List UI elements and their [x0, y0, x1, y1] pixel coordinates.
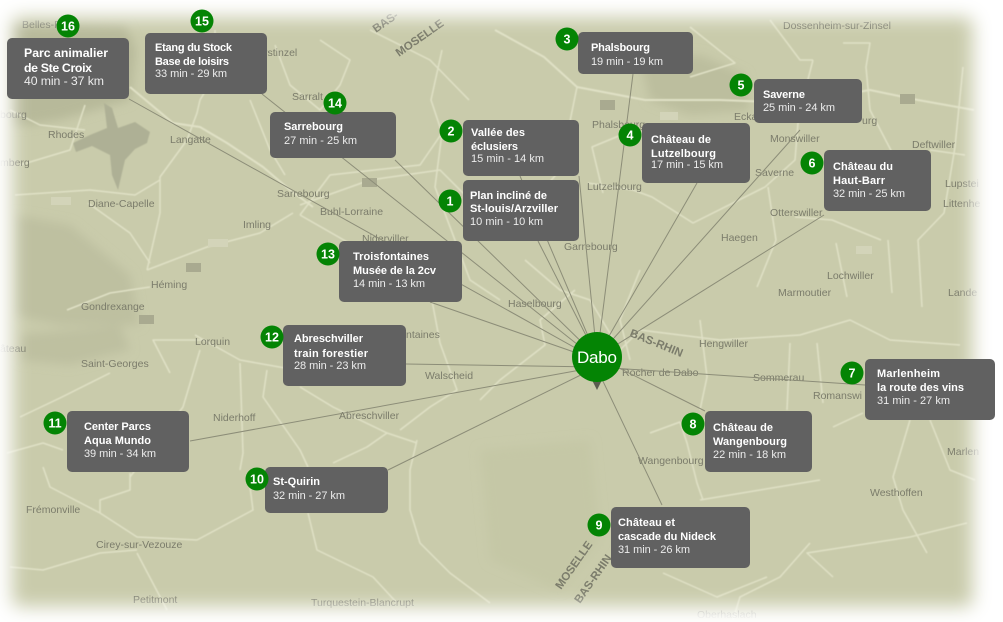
destination 15: Etang du Stock — [155, 42, 233, 54]
destination 4: 4 — [627, 128, 634, 142]
destination 2: éclusiers — [471, 141, 518, 153]
place labels: Cirey-sur-Vezouze — [96, 539, 183, 551]
place labels: Walscheid — [425, 370, 473, 382]
place labels: BAS- — [371, 9, 401, 35]
destination 10: 32 min - 27 km — [273, 490, 345, 502]
destination 8: 22 min - 18 km — [713, 449, 786, 461]
destination 1: St-louis/Arzviller — [470, 203, 559, 215]
destination 3: 3 — [564, 32, 571, 46]
destination 14: Sarrebourg — [284, 121, 343, 133]
place labels: Lupstei — [945, 178, 979, 190]
destination 7: 7 — [849, 366, 856, 380]
destination 5: 5 — [738, 78, 745, 92]
place labels: Marlen — [947, 446, 979, 458]
place labels: Littenhe — [943, 198, 981, 210]
destination 16: Parc animalier — [24, 46, 108, 60]
destination 6 — [800, 150, 931, 211]
place labels: Romanswi — [813, 390, 862, 402]
destination 2: 2 — [448, 124, 455, 138]
place labels: MOSELLE — [394, 18, 447, 59]
place labels: Wangenbourg — [638, 455, 704, 467]
destination 13 — [316, 241, 462, 302]
destination 8: Château de — [713, 422, 773, 434]
place labels: Langatte — [170, 134, 211, 146]
destination 7: la route des vins — [877, 382, 964, 394]
destination 13: Musée de la 2cv — [353, 265, 437, 277]
destination 16: 40 min - 37 km — [24, 74, 104, 88]
destination 7: 31 min - 27 km — [877, 395, 950, 407]
destination 4: Lutzelbourg — [651, 148, 716, 160]
place labels: bourg — [0, 109, 27, 121]
road badges — [51, 94, 915, 324]
place labels: âteau — [0, 343, 26, 355]
place labels: Haegen — [721, 232, 758, 244]
place labels: Diane-Capelle — [88, 198, 155, 210]
place labels: BAS-RHIN — [573, 553, 615, 606]
place labels: Haselbourg — [508, 298, 562, 310]
destination 9: Château et — [618, 517, 675, 529]
destination 14 — [270, 92, 396, 158]
place labels: Héming — [151, 279, 187, 291]
destination 15 — [145, 10, 267, 94]
place labels: Rhodes — [48, 129, 84, 141]
destination 12: train forestier — [294, 348, 369, 360]
destination 11 — [44, 411, 189, 472]
place labels: Hengwiller — [699, 338, 749, 350]
destination 13: Troisfontaines — [353, 251, 429, 263]
destination 2: Vallée des — [471, 127, 525, 139]
destination 5 — [730, 74, 862, 123]
destination 2 — [440, 120, 579, 176]
destination 9 — [588, 507, 750, 568]
destination 11: 11 — [48, 416, 62, 430]
place labels: Westhoffen — [870, 487, 923, 499]
destination 8: Wangenbourg — [713, 436, 787, 448]
place labels: Marmoutier — [778, 287, 832, 299]
destination 1 — [438, 180, 579, 241]
destination 3 — [556, 28, 693, 74]
destination 6: 6 — [809, 156, 816, 170]
destination 7: Marlenheim — [877, 368, 940, 380]
connector lines to Dabo — [129, 74, 865, 505]
destination 4: Château de — [651, 134, 711, 146]
place labels: BAS-RHIN — [628, 328, 685, 360]
place labels: Sarralt — [292, 91, 323, 103]
place labels: Lutzelbourg — [587, 181, 642, 193]
destination 16: 16 — [61, 20, 75, 34]
destination 16: de Ste Croix — [24, 61, 92, 75]
place labels: Garrebourg — [564, 241, 618, 253]
place labels: Lorquin — [195, 336, 230, 348]
place labels: Sarrebourg — [277, 188, 330, 200]
place labels: Abreschviller — [339, 410, 400, 422]
destination 10: St-Quirin — [273, 476, 320, 488]
destination 12: 28 min - 23 km — [294, 360, 366, 372]
destination 1: Plan incliné de — [470, 190, 547, 202]
place labels: Turquestein-Blancrupt — [311, 597, 414, 609]
destination 8: 8 — [690, 418, 697, 432]
place labels: Frémonville — [26, 504, 80, 516]
destination 9: 9 — [596, 518, 603, 532]
destination 10: 10 — [250, 472, 264, 486]
place labels: Deftwiller — [912, 139, 956, 151]
place labels: Niderviller — [362, 233, 409, 245]
place labels: Eckar — [734, 111, 761, 123]
place labels: Sommerau — [753, 372, 805, 384]
place labels: Oberhaslach — [697, 609, 757, 621]
place labels: Saint-Georges — [81, 358, 149, 370]
place labels: Dossenheim-sur-Zinsel — [783, 20, 891, 32]
destination 10 — [246, 467, 388, 513]
place labels: Monswiller — [770, 133, 820, 145]
destination 9: cascade du Nideck — [618, 531, 717, 543]
destination 9: 31 min - 26 km — [618, 544, 690, 556]
destination 15: 33 min - 29 km — [155, 68, 227, 80]
destination 13: 13 — [321, 248, 335, 262]
place labels: Gondrexange — [81, 301, 145, 313]
place labels: ntaines — [406, 329, 440, 341]
place labels: Belles-F — [22, 19, 61, 31]
place labels: urg — [862, 115, 877, 127]
destination 14: 27 min - 25 km — [284, 135, 357, 147]
place labels: MOSELLE — [554, 539, 596, 592]
destination 11: Aqua Mundo — [84, 435, 151, 447]
place labels: Saverne — [755, 167, 794, 179]
place labels: Otterswiller — [770, 207, 823, 219]
place labels: Buhl-Lorraine — [320, 206, 383, 218]
destination 3: Phalsbourg — [591, 42, 650, 54]
place labels: Lande — [948, 287, 977, 299]
destination 6: 32 min - 25 km — [833, 188, 905, 200]
place labels: Phalsbourg — [592, 119, 645, 131]
terrain shading — [14, 24, 746, 362]
place labels: Petitmont — [133, 594, 177, 606]
destination 4: 17 min - 15 km — [651, 159, 723, 171]
destination 4 — [618, 123, 750, 183]
destination 14: 14 — [328, 96, 342, 110]
destination 7 — [840, 359, 995, 420]
place labels: Imling — [243, 219, 271, 231]
destination 1: 1 — [447, 194, 454, 208]
destination 1: 10 min - 10 km — [470, 216, 543, 228]
destination 15: Base de loisirs — [155, 56, 229, 68]
place labels: mberg — [0, 157, 30, 169]
Dabo pin: Dabo — [577, 348, 617, 367]
destination 8 — [682, 411, 812, 472]
place labels: Niderhoff — [213, 412, 255, 424]
destination 13: 14 min - 13 km — [353, 278, 425, 290]
lake — [73, 103, 150, 190]
destination 12: Abreschviller — [294, 333, 364, 345]
Dabo pin — [572, 332, 622, 390]
place labels: Rocher de Dabo — [622, 367, 699, 379]
destination 2: 15 min - 14 km — [471, 153, 544, 165]
destination 5: 25 min - 24 km — [763, 102, 835, 114]
destination 12: 12 — [265, 330, 279, 344]
place labels: Lochwiller — [827, 270, 874, 282]
destination 15: 15 — [195, 14, 209, 28]
place labels: rstinzel — [264, 47, 297, 59]
destination 5: Saverne — [763, 89, 805, 101]
destination 6: Haut-Barr — [833, 175, 886, 187]
destination 11: 39 min - 34 km — [84, 448, 156, 460]
destination 16 — [7, 14, 129, 99]
destination 12 — [260, 325, 406, 386]
destination 11: Center Parcs — [84, 421, 151, 433]
destination 3: 19 min - 19 km — [591, 56, 663, 68]
destination 6: Château du — [833, 161, 893, 173]
